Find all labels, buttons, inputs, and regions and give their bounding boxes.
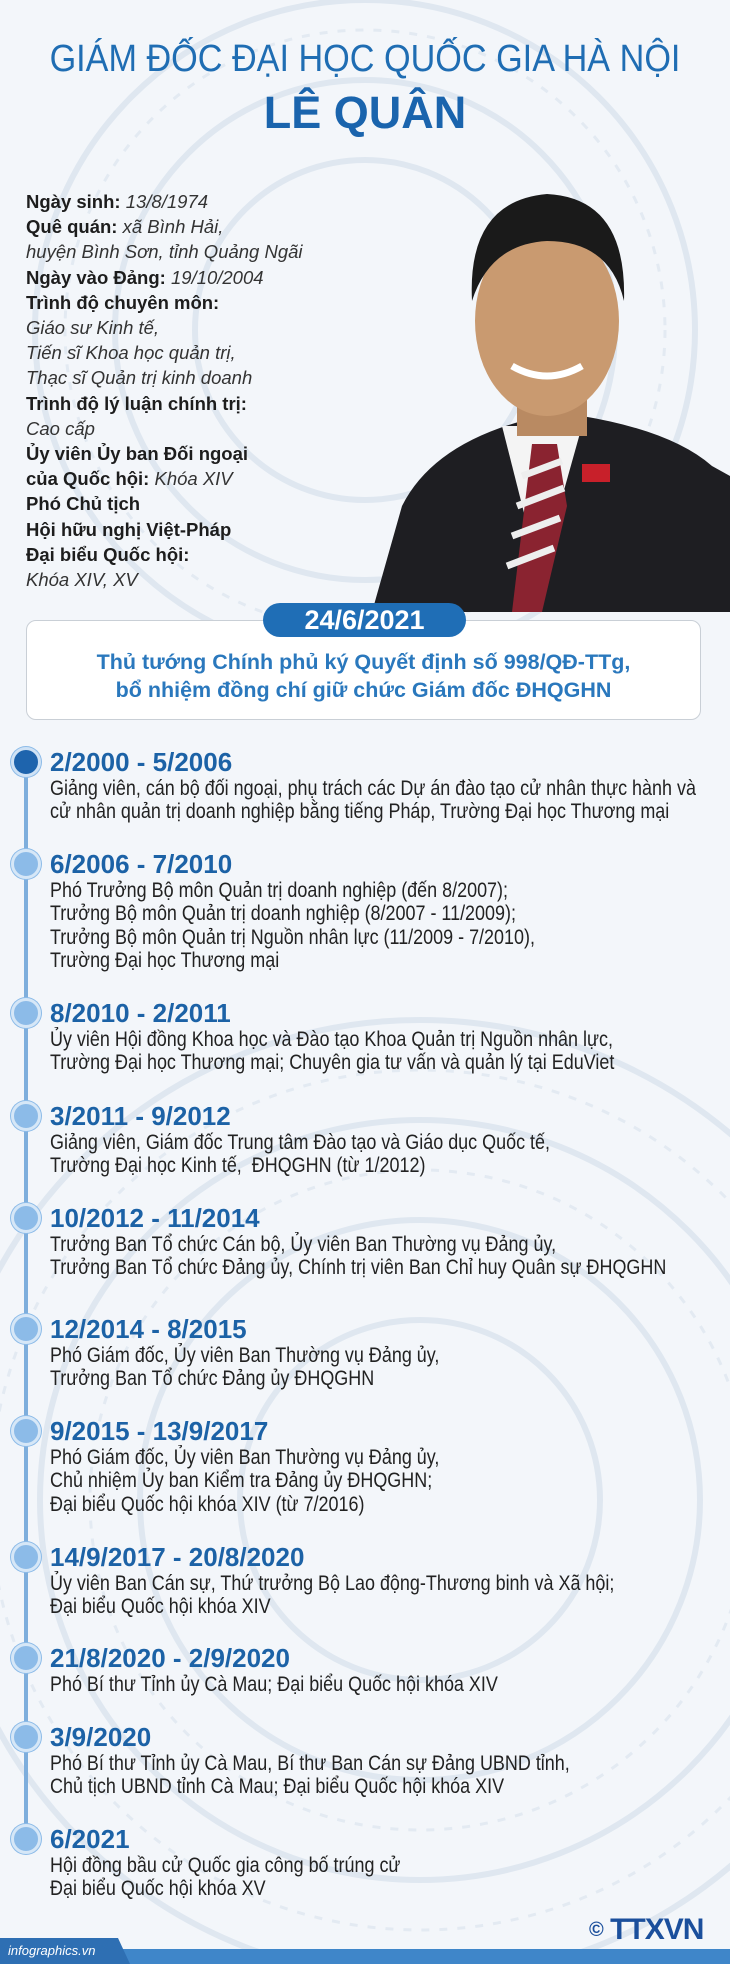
date pill [263, 603, 466, 637]
item 10: Phó Bí thư Tỉnh ủy Cà Mau, Bí thư Ban Cán sự Đảng UBND tỉnh, [50, 1752, 570, 1775]
icon: dot 9 [11, 1643, 41, 1673]
item 3 [50, 998, 614, 1074]
item 3: Trường Đại học Thương mại; Chuyên gia tư vấn và quản lý tại EduViet [50, 1051, 614, 1074]
item 11 [50, 1824, 400, 1900]
item 7 [50, 1416, 439, 1516]
footer source text: infographics.vn [8, 1943, 95, 1958]
item 5 [50, 1203, 666, 1279]
info block: Ngày sinh: 13/8/1974 [26, 191, 208, 212]
item 10 [50, 1722, 570, 1798]
item 6: Phó Giám đốc, Ủy viên Ban Thường vụ Đảng ủy, [50, 1344, 439, 1367]
item 7: Đại biểu Quốc hội khóa XIV (từ 7/2016) [50, 1493, 364, 1516]
item 10: 3/9/2020 [50, 1722, 151, 1752]
info block: Hội hữu nghị Việt-Pháp [26, 519, 231, 540]
item 4: Trường Đại học Kinh tế, ĐHQGHN (từ 1/2012) [50, 1154, 425, 1177]
info block: Phó Chủ tịch [26, 493, 140, 514]
item 7: Chủ nhiệm Ủy ban Kiểm tra Đảng ủy ĐHQGHN; [50, 1469, 432, 1492]
item 2: 6/2006 - 7/2010 [50, 849, 232, 879]
item 7: Phó Giám đốc, Ủy viên Ban Thường vụ Đảng ủy, [50, 1446, 439, 1469]
callout: appointment box [26, 620, 701, 720]
icon: dot 7 [11, 1416, 41, 1446]
info block [26, 191, 303, 590]
item 9: 21/8/2020 - 2/9/2020 [50, 1643, 290, 1673]
callout: appointment box: Thủ tướng Chính phủ ký Quyết định số 998/QĐ-TTg, [97, 650, 630, 674]
info block: Ngày vào Đảng: 19/10/2004 [26, 267, 264, 288]
info block: Ủy viên Ủy ban Đối ngoại [26, 443, 248, 464]
name heading: LÊ QUÂN [264, 87, 466, 138]
item 5: Trưởng Ban Tổ chức Đảng ủy, Chính trị viên Ban Chỉ huy Quân sự ĐHQGHN [50, 1256, 666, 1279]
info block: Giáo sư Kinh tế, [26, 317, 159, 338]
footer bar [0, 1949, 730, 1964]
icon: dot 3 [11, 998, 41, 1028]
item 3: Ủy viên Hội đồng Khoa học và Đào tạo Khoa Quản trị Nguồn nhân lực, [50, 1028, 613, 1051]
item 2: Trường Đại học Thương mại [50, 949, 279, 972]
item 11: 6/2021 [50, 1824, 130, 1854]
icon: dot 11 [11, 1824, 41, 1854]
item 1: 2/2000 - 5/2006 [50, 747, 232, 777]
date pill: 24/6/2021 [304, 605, 425, 635]
info block: Cao cấp [26, 418, 95, 439]
item 3: 8/2010 - 2/2011 [50, 998, 231, 1028]
icon: dot 2 [11, 849, 41, 879]
item 8 [50, 1542, 614, 1618]
item 9: Phó Bí thư Tỉnh ủy Cà Mau; Đại biểu Quốc hội khóa XIV [50, 1673, 498, 1696]
item 2: Phó Trưởng Bộ môn Quản trị doanh nghiệp (đến 8/2007); [50, 879, 508, 902]
item 5: 10/2012 - 11/2014 [50, 1203, 260, 1233]
item 4: Giảng viên, Giám đốc Trung tâm Đào tạo và Giáo dục Quốc tế, [50, 1131, 550, 1154]
icon: dot 1 [11, 747, 41, 777]
item 6: 12/2014 - 8/2015 [50, 1314, 247, 1344]
footer source text [0, 1938, 130, 1964]
item 4: 3/2011 - 9/2012 [50, 1101, 231, 1131]
item 8: Ủy viên Ban Cán sự, Thứ trưởng Bộ Lao động-Thương binh và Xã hội; [50, 1572, 614, 1595]
item 10: Chủ tịch UBND tỉnh Cà Mau; Đại biểu Quốc hội khóa XIV [50, 1775, 504, 1798]
logo: TTXVN: © TTXVN [589, 1913, 703, 1946]
item 1 [50, 747, 696, 823]
icon: dot 4 [11, 1101, 41, 1131]
item 2 [50, 849, 535, 972]
info block: huyện Bình Sơn, tỉnh Quảng Ngãi [26, 241, 303, 262]
item 4 [50, 1101, 550, 1177]
item 8: 14/9/2017 - 20/8/2020 [50, 1542, 304, 1572]
item 2: Trưởng Bộ môn Quản trị Nguồn nhân lực (11/2009 - 7/2010), [50, 926, 535, 949]
title: GIÁM ĐỐC ĐẠI HỌC QUỐC GIA HÀ NỘI [50, 38, 680, 80]
callout: appointment box: bổ nhiệm đồng chí giữ chức Giám đốc ĐHQGHN [116, 678, 611, 702]
icon: dot 8 [11, 1542, 41, 1572]
item 6 [50, 1314, 439, 1390]
item 11: Hội đồng bầu cử Quốc gia công bố trúng cử [50, 1854, 400, 1877]
info block: Tiến sĩ Khoa học quản trị, [26, 342, 236, 363]
item 2: Trưởng Bộ môn Quản trị doanh nghiệp (8/2007 - 11/2009); [50, 902, 516, 925]
info block: của Quốc hội: Khóa XIV [26, 468, 233, 489]
icon: dot 5 [11, 1203, 41, 1233]
item 1: cử nhân quản trị doanh nghiệp bằng tiếng Pháp, Trường Đại học Thương mại [50, 800, 669, 823]
info block: Trình độ chuyên môn: [26, 292, 219, 313]
info block: Trình độ lý luận chính trị: [26, 393, 247, 414]
info block: Khóa XIV, XV [26, 569, 138, 590]
icon: dot 6 [11, 1314, 41, 1344]
timeline line [24, 762, 28, 1839]
item 7: 9/2015 - 13/9/2017 [50, 1416, 268, 1446]
info block: Đại biểu Quốc hội: [26, 544, 189, 565]
item 5: Trưởng Ban Tổ chức Cán bộ, Ủy viên Ban Thường vụ Đảng ủy, [50, 1233, 556, 1256]
item 8: Đại biểu Quốc hội khóa XIV [50, 1595, 271, 1618]
timeline [10, 746, 696, 1900]
info block: Thạc sĩ Quản trị kinh doanh [26, 367, 252, 388]
info block: Quê quán: xã Bình Hải, [26, 216, 223, 237]
photo: portrait [374, 194, 730, 612]
icon: dot 10 [11, 1722, 41, 1752]
item 11: Đại biểu Quốc hội khóa XV [50, 1877, 266, 1900]
item 6: Trưởng Ban Tổ chức Đảng ủy ĐHQGHN [50, 1367, 374, 1390]
item 1: Giảng viên, cán bộ đối ngoại, phụ trách các Dự án đào tạo cử nhân thực hành và [50, 777, 696, 800]
item 9 [50, 1643, 498, 1696]
